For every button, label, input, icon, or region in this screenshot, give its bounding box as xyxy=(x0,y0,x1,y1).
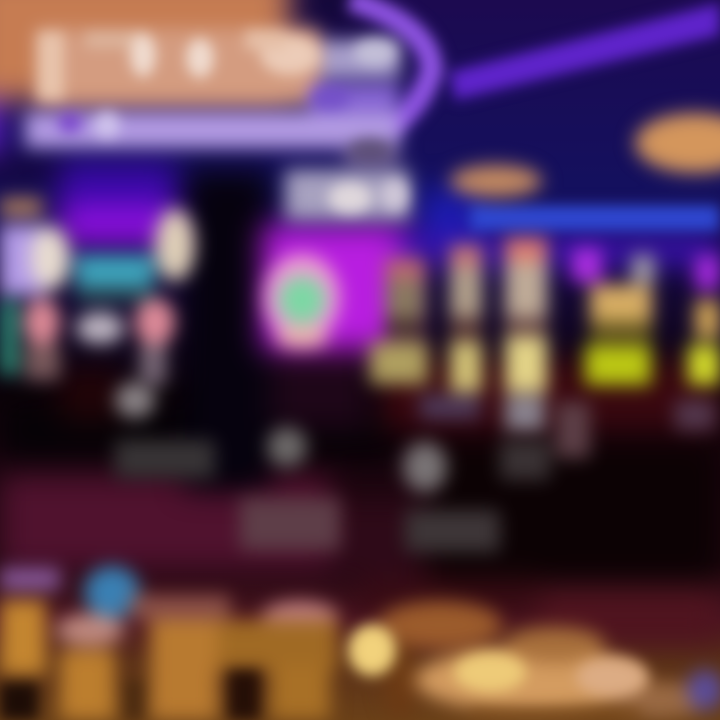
sign: top lettering xyxy=(25,28,410,220)
centre green screen xyxy=(264,254,340,348)
neon beam upper right xyxy=(350,0,720,231)
middle slot machines xyxy=(370,238,547,431)
carpet and dark floor xyxy=(0,360,720,640)
coin highlights and shadows xyxy=(0,624,648,720)
ceiling and purple glow xyxy=(0,0,720,490)
lamps xyxy=(450,113,720,197)
left slot machines xyxy=(0,198,195,385)
foreground coins xyxy=(0,566,720,720)
grey chairs xyxy=(115,382,715,552)
sign: letter highlights xyxy=(38,30,409,214)
right slot machines xyxy=(572,248,720,385)
